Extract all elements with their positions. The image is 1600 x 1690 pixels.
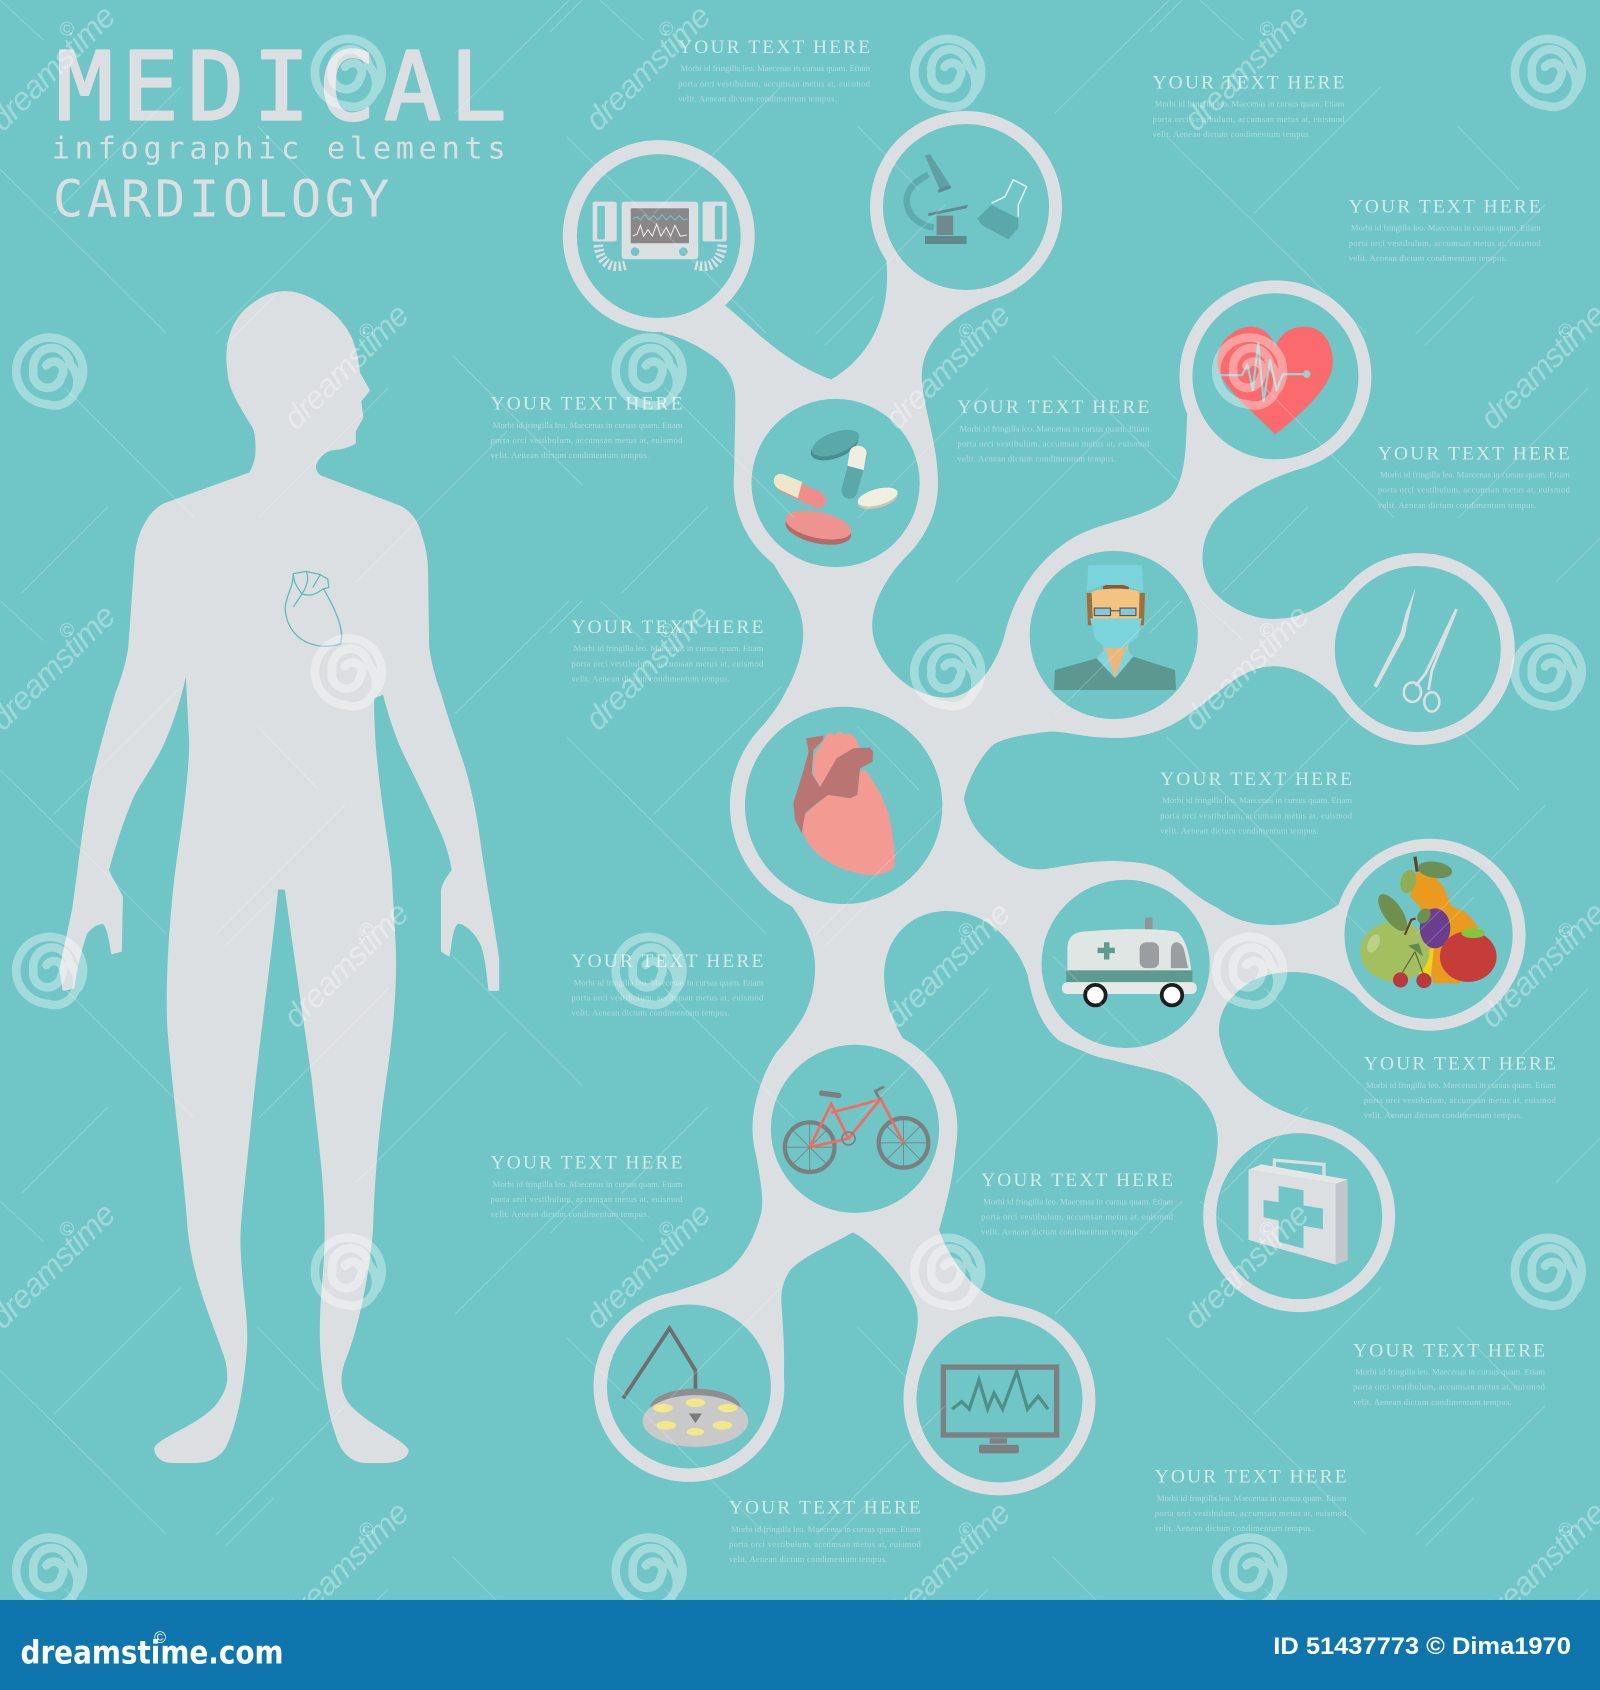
- text block 7: porta orci vestibulum, accumsan metus at, euismod: [571, 658, 764, 668]
- text block 15: velit. Aenean dictum condimentum tempus.: [729, 1554, 887, 1564]
- watermark text: dreamstime: [578, 0, 718, 138]
- watermark text: dreamstime: [878, 296, 1017, 436]
- watermark text: ©: [1260, 1219, 1274, 1241]
- icon: ambulance: [1062, 918, 1197, 1005]
- watermark text: ©: [959, 1519, 973, 1541]
- text block 6: YOUR TEXT HERE: [1378, 443, 1570, 464]
- text block 7: YOUR TEXT HERE: [571, 617, 763, 638]
- connector shape: [659, 207, 1430, 1399]
- icon: heart outline on chest: [285, 571, 342, 646]
- watermark text: ©: [959, 320, 973, 342]
- text block 12: porta orci vestibulum, accumsan metus at, euismod: [981, 1211, 1174, 1221]
- watermark text: ©: [60, 620, 74, 642]
- text block 2: [1153, 72, 1345, 139]
- text block 4: Morbi id fringilla leo. Maecenas in cursus quam. Etiam: [493, 420, 683, 430]
- watermark text: dreamstime: [878, 895, 1017, 1035]
- footer logo: ©: [154, 1629, 166, 1647]
- text block 7: velit. Aenean dictum condimentum tempus.: [571, 673, 730, 683]
- text block 8: YOUR TEXT HERE: [1160, 769, 1352, 790]
- text block 8: porta orci vestibulum, accumsan metus at, euismod: [1160, 810, 1353, 820]
- watermark text: dreamstime: [1176, 0, 1316, 138]
- text block 9: YOUR TEXT HERE: [571, 951, 763, 972]
- text block 15: [729, 1498, 921, 1564]
- watermark text: ©: [359, 320, 374, 342]
- text block 4: YOUR TEXT HERE: [491, 394, 682, 415]
- text block 1: Morbi id fringilla leo. Maecenas in cursus quam. Etiam: [680, 63, 870, 73]
- text block 9: velit. Aenean dictum condimentum tempus.: [571, 1008, 730, 1018]
- text block 12: velit. Aenean dictum condimentum tempus.: [981, 1226, 1140, 1236]
- text block 3: [1349, 196, 1541, 263]
- text block 14: Morbi id fringilla leo. Maecenas in cursus quam. Etiam: [1157, 1493, 1347, 1503]
- icon: doctor: [1054, 565, 1176, 690]
- text block 6: porta orci vestibulum, accumsan metus at, euismod: [1378, 485, 1570, 495]
- text block 9: [571, 951, 764, 1018]
- watermark text: dreamstime: [276, 1494, 416, 1634]
- footer bar: [0, 1600, 1600, 1690]
- text block 7: Morbi id fringilla leo. Maecenas in cursus quam. Etiam: [574, 643, 764, 653]
- title: MEDICAL: [56, 33, 507, 143]
- text block 11: [491, 1153, 683, 1219]
- watermark text: dreamstime: [878, 1494, 1017, 1634]
- text block 11: porta orci vestibulum, accumsan metus at, euismod: [491, 1194, 683, 1204]
- node rings: [563, 111, 1526, 1495]
- text block 11: Morbi id fringilla leo. Maecenas in cursus quam. Etiam: [493, 1179, 683, 1189]
- text block 4: velit. Aenean dictum condimentum tempus.: [491, 450, 649, 460]
- panel: network of circles: [563, 111, 1526, 1495]
- text block 10: velit. Aenean dictum condimentum tempus.: [1364, 1110, 1522, 1120]
- text block 2: velit. Aenean dictum condimentum tempus.: [1153, 129, 1311, 139]
- text block 15: YOUR TEXT HERE: [729, 1498, 921, 1519]
- node interiors: [577, 124, 1513, 1482]
- text block 10: [1364, 1054, 1556, 1120]
- text block 7: [571, 617, 764, 683]
- text block 1: [678, 37, 871, 103]
- text block 3: velit. Aenean dictum condimentum tempus.: [1349, 253, 1507, 263]
- title: infographic elements: [52, 131, 506, 166]
- text block 6: velit. Aenean dictum condimentum tempus.: [1378, 500, 1536, 510]
- watermark text: dreamstime: [276, 895, 416, 1035]
- text block 14: porta orci vestibulum, accumsan metus at, euismod: [1155, 1508, 1347, 1518]
- watermark text: dreamstime: [578, 597, 718, 737]
- text block 12: YOUR TEXT HERE: [981, 1170, 1173, 1191]
- icon: fruit: [1360, 857, 1497, 988]
- text block 12: Morbi id fringilla leo. Maecenas in cursus quam. Etiam: [983, 1196, 1173, 1206]
- watermark text: dreamstime: [1176, 597, 1316, 737]
- text block 2: Morbi id fringilla leo. Maecenas in cursus quam. Etiam: [1155, 99, 1345, 109]
- watermark text: ©: [359, 1519, 374, 1541]
- text block 9: porta orci vestibulum, accumsan metus at, euismod: [571, 993, 764, 1003]
- text block 15: Morbi id fringilla leo. Maecenas in cursus quam. Etiam: [731, 1524, 921, 1534]
- watermark text: dreamstime: [1176, 1196, 1316, 1335]
- text block 4: [491, 394, 683, 460]
- text block 10: porta orci vestibulum, accumsan metus at, euismod: [1364, 1095, 1556, 1105]
- text block 5: [957, 397, 1150, 463]
- watermark text: ©: [359, 920, 374, 942]
- icon: pills: [773, 425, 900, 550]
- text block 3: YOUR TEXT HERE: [1349, 196, 1541, 217]
- watermark text: dreamstime: [578, 1196, 718, 1335]
- text block 11: velit. Aenean dictum condimentum tempus.: [491, 1209, 649, 1219]
- icon: bicycle: [785, 1087, 928, 1172]
- watermark text: ©: [959, 920, 973, 942]
- watermark text: ©: [1260, 19, 1274, 41]
- icon: anatomical heart: [793, 731, 895, 875]
- text block 10: Morbi id fringilla leo. Maecenas in cursus quam. Etiam: [1366, 1080, 1556, 1090]
- footer logo: dreamstime.com: [20, 1634, 284, 1672]
- icon: microscope and flask: [907, 154, 1027, 244]
- text block 14: [1155, 1466, 1347, 1533]
- text block 2: porta orci vestibulum, accumsan metus at, euismod: [1153, 114, 1345, 124]
- watermark text: ©: [1558, 320, 1573, 342]
- icon: heart rate monitor: [943, 1367, 1057, 1453]
- text block 3: Morbi id fringilla leo. Maecenas in cursus quam. Etiam: [1351, 223, 1541, 233]
- text block 14: YOUR TEXT HERE: [1155, 1466, 1347, 1487]
- text block 6: [1378, 443, 1570, 510]
- text block 8: velit. Aenean dictum condimentum tempus.: [1160, 825, 1319, 835]
- title: CARDIOLOGY: [53, 170, 389, 229]
- text block 8: Morbi id fringilla leo. Maecenas in cursus quam. Etiam: [1162, 795, 1352, 805]
- watermark text: ©: [1558, 920, 1573, 942]
- watermark text: ©: [659, 620, 673, 642]
- icon: first aid kit: [1249, 1160, 1348, 1265]
- text block 1: YOUR TEXT HERE: [678, 37, 870, 58]
- watermark text: ©: [60, 1219, 74, 1241]
- text block 3: porta orci vestibulum, accumsan metus at, euismod: [1349, 238, 1541, 248]
- icon: scalpel and forceps: [1374, 588, 1457, 712]
- text block 5: Morbi id fringilla leo. Maecenas in cursus quam. Etiam: [960, 423, 1150, 433]
- text block 5: YOUR TEXT HERE: [957, 397, 1149, 418]
- text block 13: velit. Aenean dictum condimentum tempus.: [1353, 1397, 1512, 1407]
- watermark text: ©: [1260, 620, 1274, 642]
- text block 14: velit. Aenean dictum condimentum tempus.: [1155, 1523, 1313, 1533]
- icon: defibrillator: [593, 202, 727, 266]
- watermark text: ©: [659, 19, 673, 41]
- text block 9: Morbi id fringilla leo. Maecenas in cursus quam. Etiam: [574, 977, 764, 987]
- text block 1: velit. Aenean dictum condimentum tempus.: [678, 93, 837, 103]
- text block 11: YOUR TEXT HERE: [491, 1153, 682, 1174]
- human body silhouette: [60, 292, 498, 1462]
- text block 10: YOUR TEXT HERE: [1364, 1054, 1556, 1075]
- title: [52, 33, 507, 229]
- text block 5: porta orci vestibulum, accumsan metus at, euismod: [957, 438, 1150, 448]
- text block 13: Morbi id fringilla leo. Maecenas in cursus quam. Etiam: [1355, 1367, 1545, 1377]
- text block 6: Morbi id fringilla leo. Maecenas in cursus quam. Etiam: [1380, 470, 1570, 480]
- text block 15: porta orci vestibulum, accumsan metus at, euismod: [729, 1539, 921, 1549]
- watermark text: ©: [60, 19, 74, 41]
- text block 2: YOUR TEXT HERE: [1153, 72, 1344, 93]
- text block 13: [1353, 1340, 1546, 1407]
- watermark text: ©: [1558, 1519, 1573, 1541]
- text block 12: [981, 1170, 1174, 1236]
- icon: heart with pulse: [1217, 327, 1333, 434]
- watermark text: ©: [659, 1219, 673, 1241]
- watermark text: dreamstime: [276, 296, 416, 436]
- text block 4: porta orci vestibulum, accumsan metus at, euismod: [491, 435, 683, 445]
- text block 5: velit. Aenean dictum condimentum tempus.: [957, 453, 1116, 463]
- icon: surgical lamp: [623, 1328, 748, 1447]
- footer image id: ID 51437773 © Dima1970: [1273, 1633, 1571, 1660]
- text block 8: [1160, 769, 1353, 835]
- text block 13: porta orci vestibulum, accumsan metus at, euismod: [1353, 1382, 1546, 1392]
- text block 13: YOUR TEXT HERE: [1353, 1340, 1545, 1361]
- text block 1: porta orci vestibulum, accumsan metus at, euismod: [678, 78, 871, 88]
